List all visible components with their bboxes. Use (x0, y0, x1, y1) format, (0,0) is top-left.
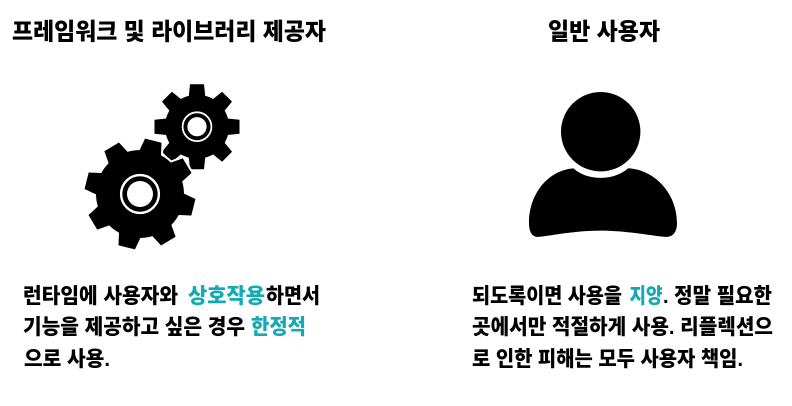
text block: provider guidance: 기능을 제공하고 싶은 경우 (23, 316, 245, 339)
text block: provider guidance: 으로 사용. (24, 348, 110, 371)
text block: provider guidance: 상호작용 (188, 285, 265, 308)
icon: gears (84, 84, 240, 250)
panel: framework and library providers (12, 18, 326, 371)
text block: provider guidance (23, 285, 320, 371)
heading: framework and library providers: 프레임워크 및 라이브러리 제공자 (12, 18, 326, 44)
panel: general users (472, 18, 773, 371)
text block: user guidance: 되도록이면 사용을 (472, 285, 622, 308)
icon: person (529, 92, 677, 237)
text block: user guidance: 곳에서만 적절하게 사용. 리플렉션으 (472, 316, 773, 339)
icon: small gear (154, 84, 240, 169)
text block: user guidance (472, 285, 773, 371)
text block: user guidance: 로 인한 피해는 모두 사용자 책임. (472, 348, 743, 371)
text block: user guidance: . 정말 필요한 (663, 285, 772, 308)
text block: provider guidance: 하면서 (266, 285, 320, 308)
text block: provider guidance: 한정적 (251, 316, 306, 339)
heading: general users: 일반 사용자 (548, 18, 660, 44)
text block: user guidance: 지양 (630, 285, 662, 308)
text block: provider guidance: 런타임에 사용자와 (23, 285, 178, 308)
icon: large gear (84, 138, 196, 250)
